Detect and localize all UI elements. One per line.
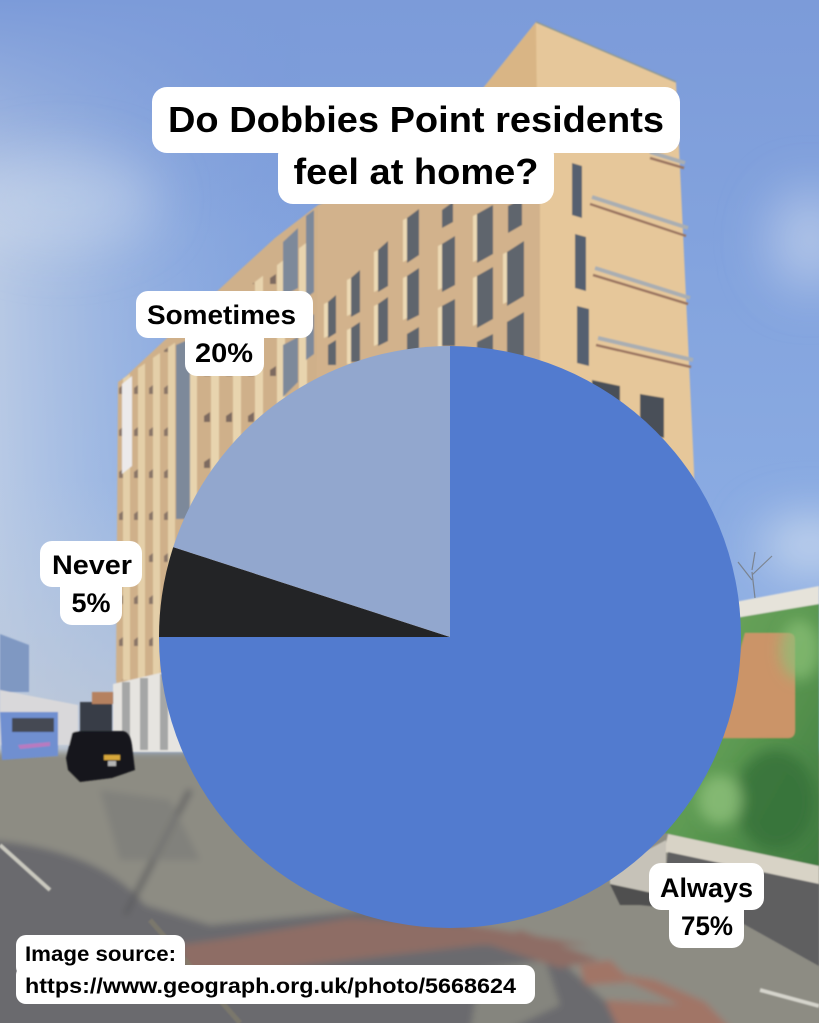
image source credit (16, 935, 535, 1004)
label: Sometimes 20%: 20% (195, 338, 253, 368)
red road markings (180, 918, 590, 980)
label: Always 75% (649, 863, 764, 948)
label: Never 5%: 5% (72, 588, 110, 618)
label: Sometimes 20% (136, 291, 313, 376)
road (0, 752, 819, 1023)
slice: Always 75% (159, 346, 741, 928)
road lane lines (0, 845, 819, 1023)
tree branches (738, 552, 772, 598)
label: Sometimes 20%: Sometimes (147, 300, 296, 330)
label: Never 5%: Never (52, 550, 133, 580)
label: Always 75%: 75% (681, 911, 733, 941)
title: feel at home? (294, 151, 538, 192)
building (113, 22, 696, 752)
tower fins (592, 152, 693, 360)
clouds (0, 150, 819, 570)
low buildings, bus and taxi (0, 634, 135, 782)
title (152, 87, 680, 204)
ground floor columns (113, 666, 190, 752)
pie chart (159, 346, 741, 928)
tower slits (572, 163, 589, 366)
image source credit: https://www.geograph.org.uk/photo/5668624 (25, 975, 516, 998)
left wing glazing (176, 210, 314, 519)
mid wing window reveals (324, 214, 507, 364)
tower lower windows (592, 380, 664, 438)
slice: Sometimes 20% (173, 346, 450, 637)
label: Always 75%: Always (660, 873, 753, 903)
slice: Never 5% (159, 547, 450, 637)
label: Never 5% (40, 541, 142, 625)
image source credit: Image source: (25, 943, 176, 966)
mid wing windows (328, 199, 524, 365)
truck with greens (610, 586, 819, 966)
title: Do Dobbies Point residents (168, 99, 664, 140)
